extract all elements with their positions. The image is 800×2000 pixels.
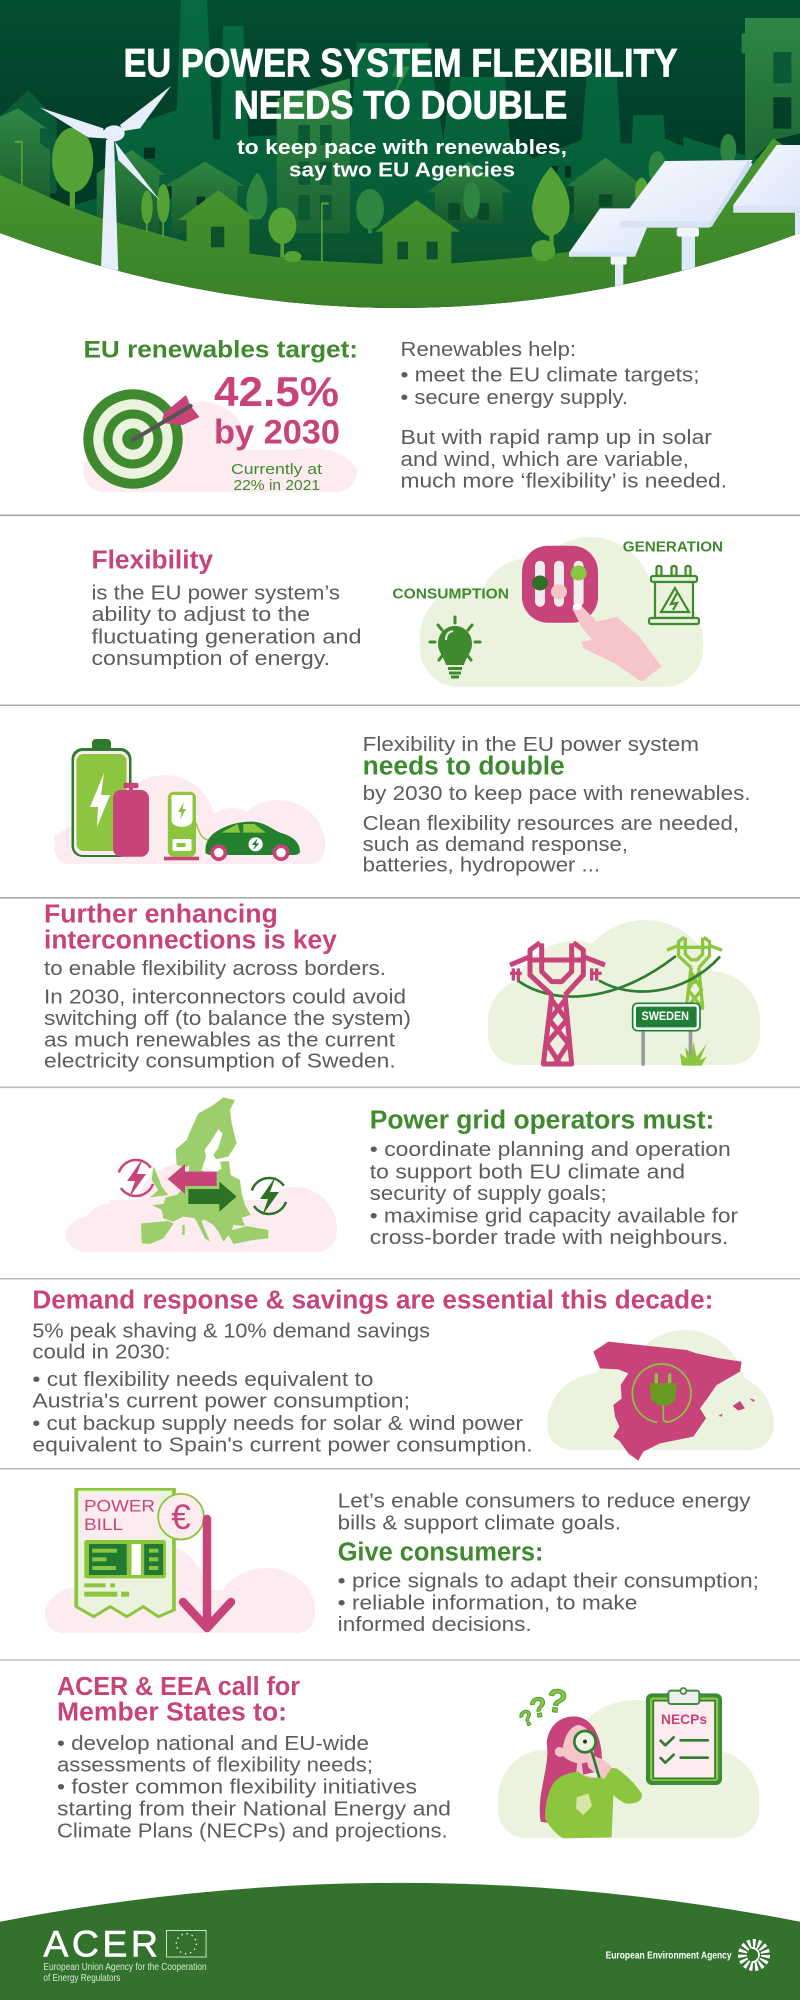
heading [57, 1673, 300, 1727]
text block [370, 1139, 738, 1249]
icon: large battery [72, 739, 132, 857]
cloud background [498, 1700, 759, 1846]
heading: ACER & EEA call for [57, 1673, 300, 1701]
icon: slider control [522, 546, 598, 623]
text block: Austria's current power consumption; [32, 1391, 410, 1413]
heading: interconnections is key [44, 926, 338, 954]
cloud background [547, 1330, 774, 1450]
icon: electric car [205, 822, 300, 861]
text block: • cut flexibility needs equivalent to [32, 1369, 374, 1391]
text block: informed decisions. [338, 1614, 532, 1636]
faint bolt on cooling tower [390, 47, 410, 103]
icon: NECPs clipboard: NECPs [661, 1711, 707, 1727]
title: NEEDS TO DOUBLE [234, 84, 567, 128]
text block: equivalent to Spain's current power consumption. [32, 1435, 533, 1457]
grass tuft [680, 1042, 707, 1066]
subtitle: to keep pace with renewables, [237, 136, 567, 159]
panel: EU renewables target [83, 336, 727, 502]
text block: • secure energy supply. [400, 387, 628, 409]
panel: flexibility definition [92, 537, 723, 691]
text block: But with rapid ramp up in solar [400, 427, 712, 449]
icon: power bill: BILL [84, 1515, 123, 1534]
mid trees [246, 134, 736, 233]
current share note: Currently at [231, 461, 323, 478]
cloud background [84, 402, 357, 492]
heading: Flexibility [92, 546, 214, 574]
cloud background [488, 920, 760, 1071]
text block: to support both EU climate and [370, 1161, 685, 1183]
question marks [515, 1681, 570, 1732]
logo: ACER [43, 1923, 207, 1984]
illustration: pylons and sign [510, 937, 722, 1066]
text block: Climate Plans (NECPs) and projections. [57, 1820, 448, 1842]
text block: In 2030, interconnectors could avoid [44, 986, 406, 1008]
pink pylon [510, 943, 605, 1064]
heading: Further enhancing [44, 901, 278, 929]
icon: euro coin [158, 1494, 204, 1539]
title: EU POWER SYSTEM FLEXIBILITY [124, 42, 678, 86]
text block: fluctuating generation and [92, 626, 362, 648]
text block: • develop national and EU-wide [57, 1733, 369, 1755]
text block: Let’s enable consumers to reduce energy [338, 1490, 751, 1512]
text block: and wind, which are variable, [400, 449, 689, 471]
text block [338, 1490, 759, 1636]
heading: Power grid operators must: [370, 1106, 714, 1134]
panel: consumers and power bill [45, 1488, 757, 1633]
text block [92, 582, 362, 670]
arrow: bills going down [183, 1519, 231, 1628]
front house windows [211, 227, 438, 259]
text block: starting from their National Energy and [57, 1799, 451, 1821]
text block: • maximise grid capacity available for [370, 1205, 738, 1227]
logo: ACER: European Union Agency for the Cooperation [43, 1961, 207, 1973]
text block: ability to adjust to the [92, 604, 310, 626]
icon: target with dart [83, 389, 200, 489]
text block [400, 339, 727, 493]
factory silhouette [0, 0, 800, 313]
green pylon [667, 937, 722, 1008]
question marks: ? [515, 1704, 538, 1732]
text block: Clean flexibility resources are needed, [363, 813, 739, 835]
subtitle: say two EU Agencies [289, 159, 515, 182]
panel: interconnections [44, 901, 760, 1073]
text block: Renewables help: [400, 339, 576, 361]
heading [44, 901, 338, 954]
sign posts [641, 1030, 692, 1066]
panel: hero illustration with title [0, 0, 800, 320]
central tall building with windows [277, 78, 350, 233]
text block: Give consumers: [338, 1539, 544, 1567]
text block: switching off (to balance the system) [44, 1008, 411, 1030]
text block [32, 1320, 533, 1457]
big number: by 2030 [214, 413, 340, 451]
text block: • coordinate planning and operation [370, 1139, 731, 1161]
text block: as much renewables as the current [44, 1030, 395, 1052]
sign label: SWEDEN [642, 1011, 689, 1023]
text block: needs to double [363, 752, 565, 780]
text block: batteries, hydropower ... [363, 855, 600, 877]
logo: European Environment Agency [606, 1944, 766, 1966]
hero scene: green paper-cut town [0, 0, 800, 320]
text block: • cut backup supply needs for solar & wind power [32, 1413, 523, 1435]
wind turbine [40, 86, 171, 273]
text block [57, 1733, 451, 1842]
text block: • foster common flexibility initiatives [57, 1776, 417, 1798]
text block: much more ‘flexibility’ is needed. [400, 471, 727, 493]
cloud background [66, 1164, 337, 1252]
icon: NECPs clipboard [646, 1688, 722, 1785]
text block: Flexibility in the EU power system [363, 734, 699, 756]
icon: green energy ring [251, 1176, 287, 1216]
logo: ACER: of Energy Regulators [43, 1972, 120, 1984]
text block: could in 2030: [32, 1341, 171, 1363]
question marks: ? [544, 1681, 570, 1721]
cloud background [420, 537, 703, 691]
panel: power grid operators [66, 1097, 738, 1252]
text block: bills & support climate goals. [338, 1512, 621, 1534]
text block: • reliable information, to make [338, 1592, 637, 1614]
big number: 42.5% [214, 368, 339, 415]
heading: EU renewables target: [84, 336, 358, 363]
text block: cross-border trade with neighbours. [370, 1227, 728, 1249]
bright trees and street lamps [15, 128, 648, 262]
subtitle [237, 136, 567, 182]
icon: pink energy ring [118, 1158, 154, 1198]
text block [363, 734, 751, 877]
label: generation: GENERATION [623, 540, 723, 556]
icon: power bill [76, 1489, 174, 1617]
text block: is the EU power system’s [92, 582, 340, 604]
title [124, 42, 678, 128]
arrows: exchange between countries [168, 1164, 237, 1212]
far right tall building [742, 18, 800, 167]
icon: storage cylinder [113, 783, 149, 857]
text block: consumption of energy. [92, 648, 330, 670]
icon: pointing hand [572, 603, 662, 682]
icon: transformer [649, 566, 699, 624]
cloud background [45, 1548, 315, 1633]
panel: ACER and EEA call [57, 1673, 759, 1846]
heading: Demand response & savings are essential this decade: [32, 1286, 713, 1314]
text block [44, 958, 411, 1073]
icon: light bulb [430, 617, 480, 678]
label: consumption: CONSUMPTION [392, 587, 509, 603]
icon: power bill: POWER [84, 1497, 155, 1516]
text block: by 2030 to keep pace with renewables. [363, 783, 751, 805]
icon: charging station [164, 792, 212, 860]
panel: demand response and savings [32, 1290, 774, 1461]
heading: Member States to: [57, 1699, 287, 1727]
front hill [0, 138, 800, 313]
text block: 5% peak shaving & 10% demand savings [32, 1320, 430, 1342]
big number [214, 368, 340, 451]
text block: to enable flexibility across borders. [44, 958, 386, 980]
cloud background [54, 775, 325, 864]
solar panels [569, 145, 800, 293]
map of Spain with plug [593, 1342, 755, 1461]
text block: assessments of flexibility needs; [57, 1755, 373, 1777]
panel: flexibility needs to double [54, 736, 749, 876]
footer band [0, 1883, 800, 2000]
text block: security of supply goals; [370, 1183, 607, 1205]
map of Europe [141, 1097, 268, 1244]
illustration: woman with magnifying glass [540, 1716, 642, 1838]
text block: • meet the EU climate targets; [400, 365, 700, 387]
current share note [231, 461, 323, 494]
text block: • price signals to adapt their consumption; [338, 1570, 759, 1592]
text block: such as demand response, [363, 834, 628, 856]
text block: electricity consumption of Sweden. [44, 1051, 396, 1073]
logo: European Environment Agency: European Environment Agency [606, 1950, 732, 1962]
background houses [0, 90, 642, 233]
current share note: 22% in 2021 [234, 477, 320, 494]
question marks: ? [527, 1690, 550, 1724]
icon: euro coin: € [171, 1498, 191, 1537]
logo: ACER: ACER [43, 1923, 158, 1965]
